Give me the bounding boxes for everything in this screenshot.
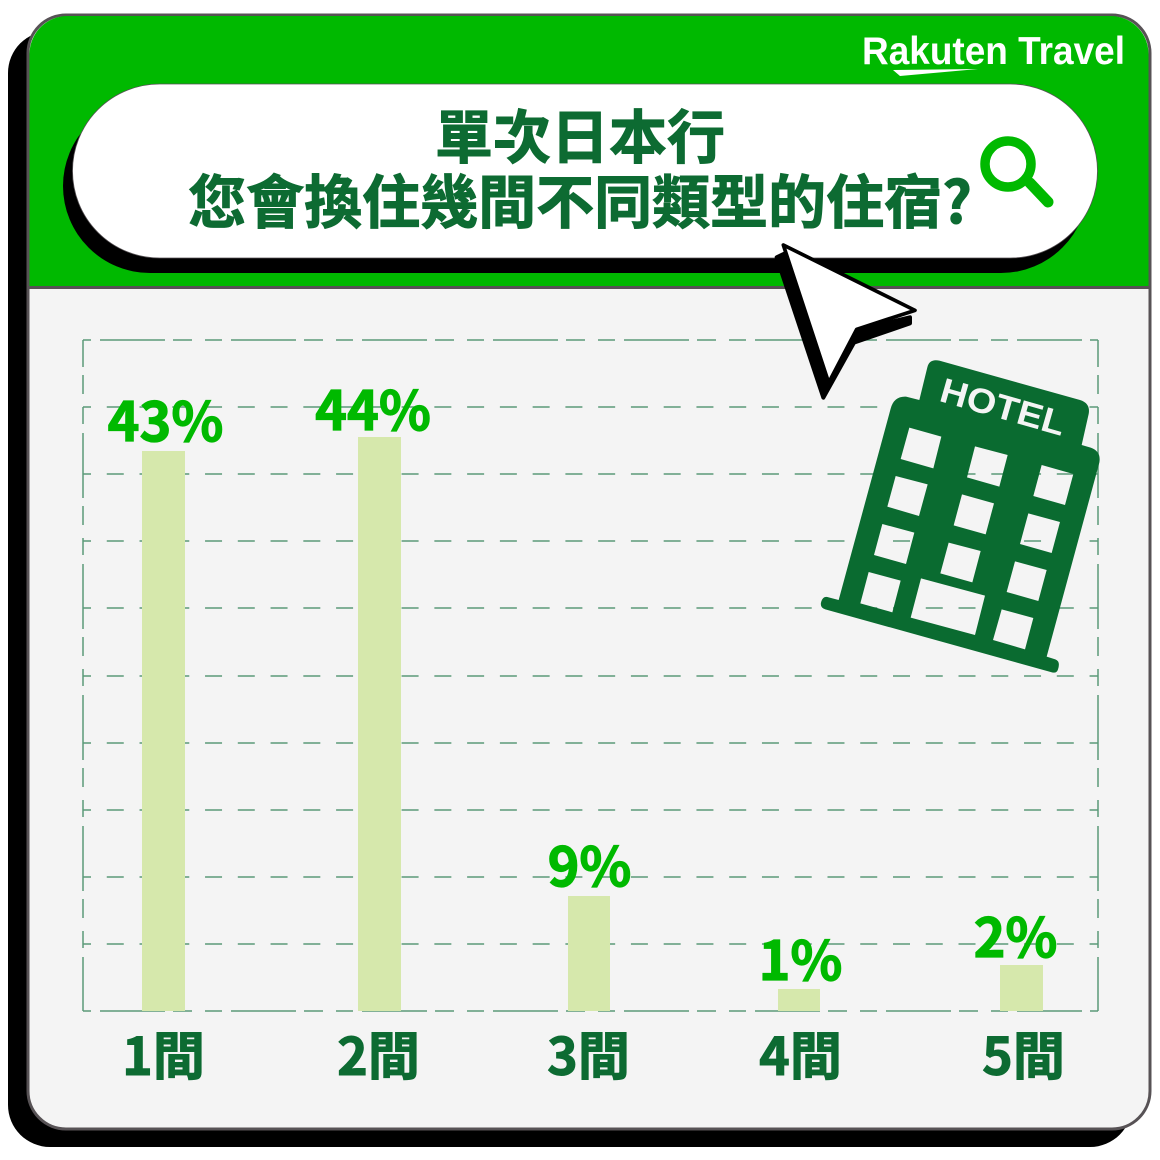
bar: 4間 1% bbox=[778, 989, 820, 1011]
category labels bbox=[122, 1015, 1065, 1090]
hotel sign text: HOTEL bbox=[936, 372, 1070, 444]
search bar bbox=[63, 84, 1098, 273]
cursor arrow bbox=[783, 245, 915, 383]
title: 單次日本行 bbox=[435, 91, 725, 175]
bar: 1間 43% bbox=[142, 451, 185, 1011]
value labels: 2% bbox=[974, 894, 1057, 973]
category labels: 5間 bbox=[982, 1015, 1065, 1090]
category labels: 2間 bbox=[337, 1015, 420, 1090]
search bar shadow bbox=[63, 99, 1088, 273]
logo: Rakuten Travel: Rakuten Travel bbox=[862, 30, 1125, 73]
bar chart bbox=[142, 437, 1043, 1011]
bar: 5間 2% bbox=[1000, 965, 1043, 1011]
value labels: 1% bbox=[759, 917, 842, 996]
search bar pill bbox=[72, 84, 1098, 258]
green header band bbox=[30, 16, 1148, 286]
bar: 2間 44% bbox=[358, 437, 401, 1011]
value labels: 9% bbox=[548, 823, 631, 902]
category labels: 3間 bbox=[547, 1015, 630, 1090]
icon: mouse cursor bbox=[777, 245, 915, 398]
value labels bbox=[108, 367, 1057, 996]
category labels: 4間 bbox=[759, 1015, 842, 1090]
chart grid bbox=[83, 340, 1098, 1011]
cursor shadow bbox=[777, 253, 910, 398]
value labels: 44% bbox=[315, 367, 431, 446]
bar: 3間 9% bbox=[568, 896, 610, 1011]
value labels: 43% bbox=[108, 378, 223, 457]
category labels: 1間 bbox=[122, 1015, 205, 1090]
title: 您會換住幾間不同類型的住宿? bbox=[188, 156, 972, 240]
icon: magnifying glass bbox=[985, 141, 1048, 202]
icon: hotel building bbox=[821, 360, 1100, 673]
title bbox=[188, 91, 972, 240]
